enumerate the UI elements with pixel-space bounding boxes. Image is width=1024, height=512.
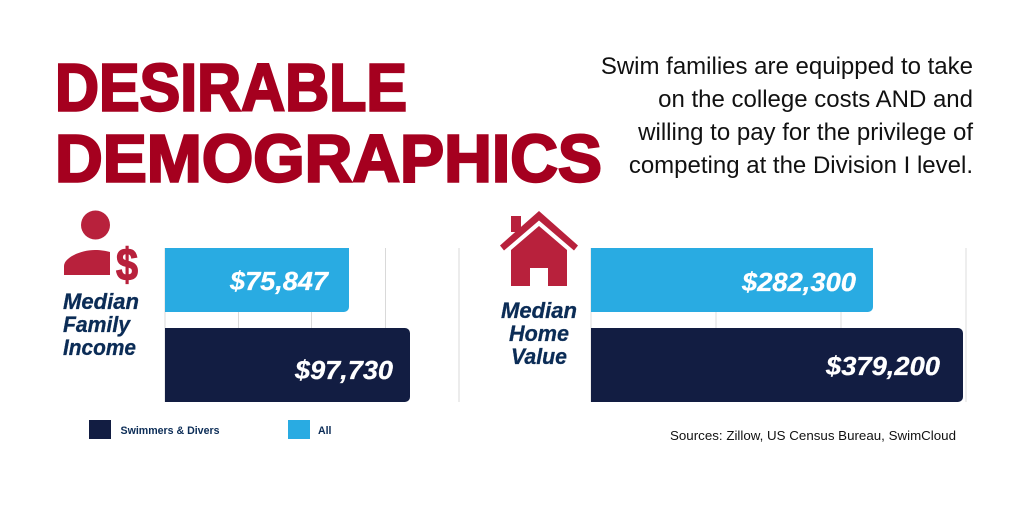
- panel: median home value chart: [591, 248, 966, 402]
- intro paragraph: [601, 53, 973, 179]
- bar: swimmers and divers, family income: [165, 328, 410, 402]
- label: median home value: Median: [501, 298, 577, 323]
- bar: all, home value: $282,300: [741, 267, 857, 297]
- bar: swimmers and divers, home value: [591, 328, 963, 402]
- sources: Sources: Zillow, US Census Bureau, SwimCloud: [670, 428, 956, 443]
- label: median family income: Median: [63, 289, 139, 314]
- bar: all, home value: [591, 248, 873, 312]
- divider: [458, 248, 460, 402]
- bar: all, family income: [165, 248, 349, 312]
- legend: Swimmers & Divers: [120, 425, 220, 437]
- legend: [89, 420, 332, 439]
- label: median family income: [63, 289, 139, 360]
- panel: median family income chart: [165, 248, 410, 402]
- legend: All: [318, 425, 332, 437]
- title: [55, 50, 602, 196]
- icon: person with dollar sign: $: [116, 239, 138, 290]
- label: median family income: Family: [63, 312, 132, 337]
- label: median home value: [501, 298, 577, 369]
- title: DESIRABLE: [55, 50, 407, 126]
- label: median home value: Value: [511, 344, 567, 369]
- bar: all, family income: $75,847: [229, 266, 330, 296]
- bar: swimmers and divers, family income: $97,730: [294, 355, 394, 385]
- intro paragraph: Swim families are equipped to take: [601, 53, 973, 80]
- intro paragraph: competing at the Division I level.: [629, 152, 973, 179]
- title: DEMOGRAPHICS: [55, 122, 602, 196]
- label: median family income: Income: [63, 335, 136, 360]
- label: median home value: Home: [509, 321, 569, 346]
- bar: swimmers and divers, home value: $379,200: [825, 351, 941, 381]
- intro paragraph: on the college costs AND and: [658, 86, 973, 113]
- icon: house: [500, 211, 578, 286]
- icon: person with dollar sign: [64, 210, 138, 290]
- intro paragraph: willing to pay for the privilege of: [637, 119, 973, 146]
